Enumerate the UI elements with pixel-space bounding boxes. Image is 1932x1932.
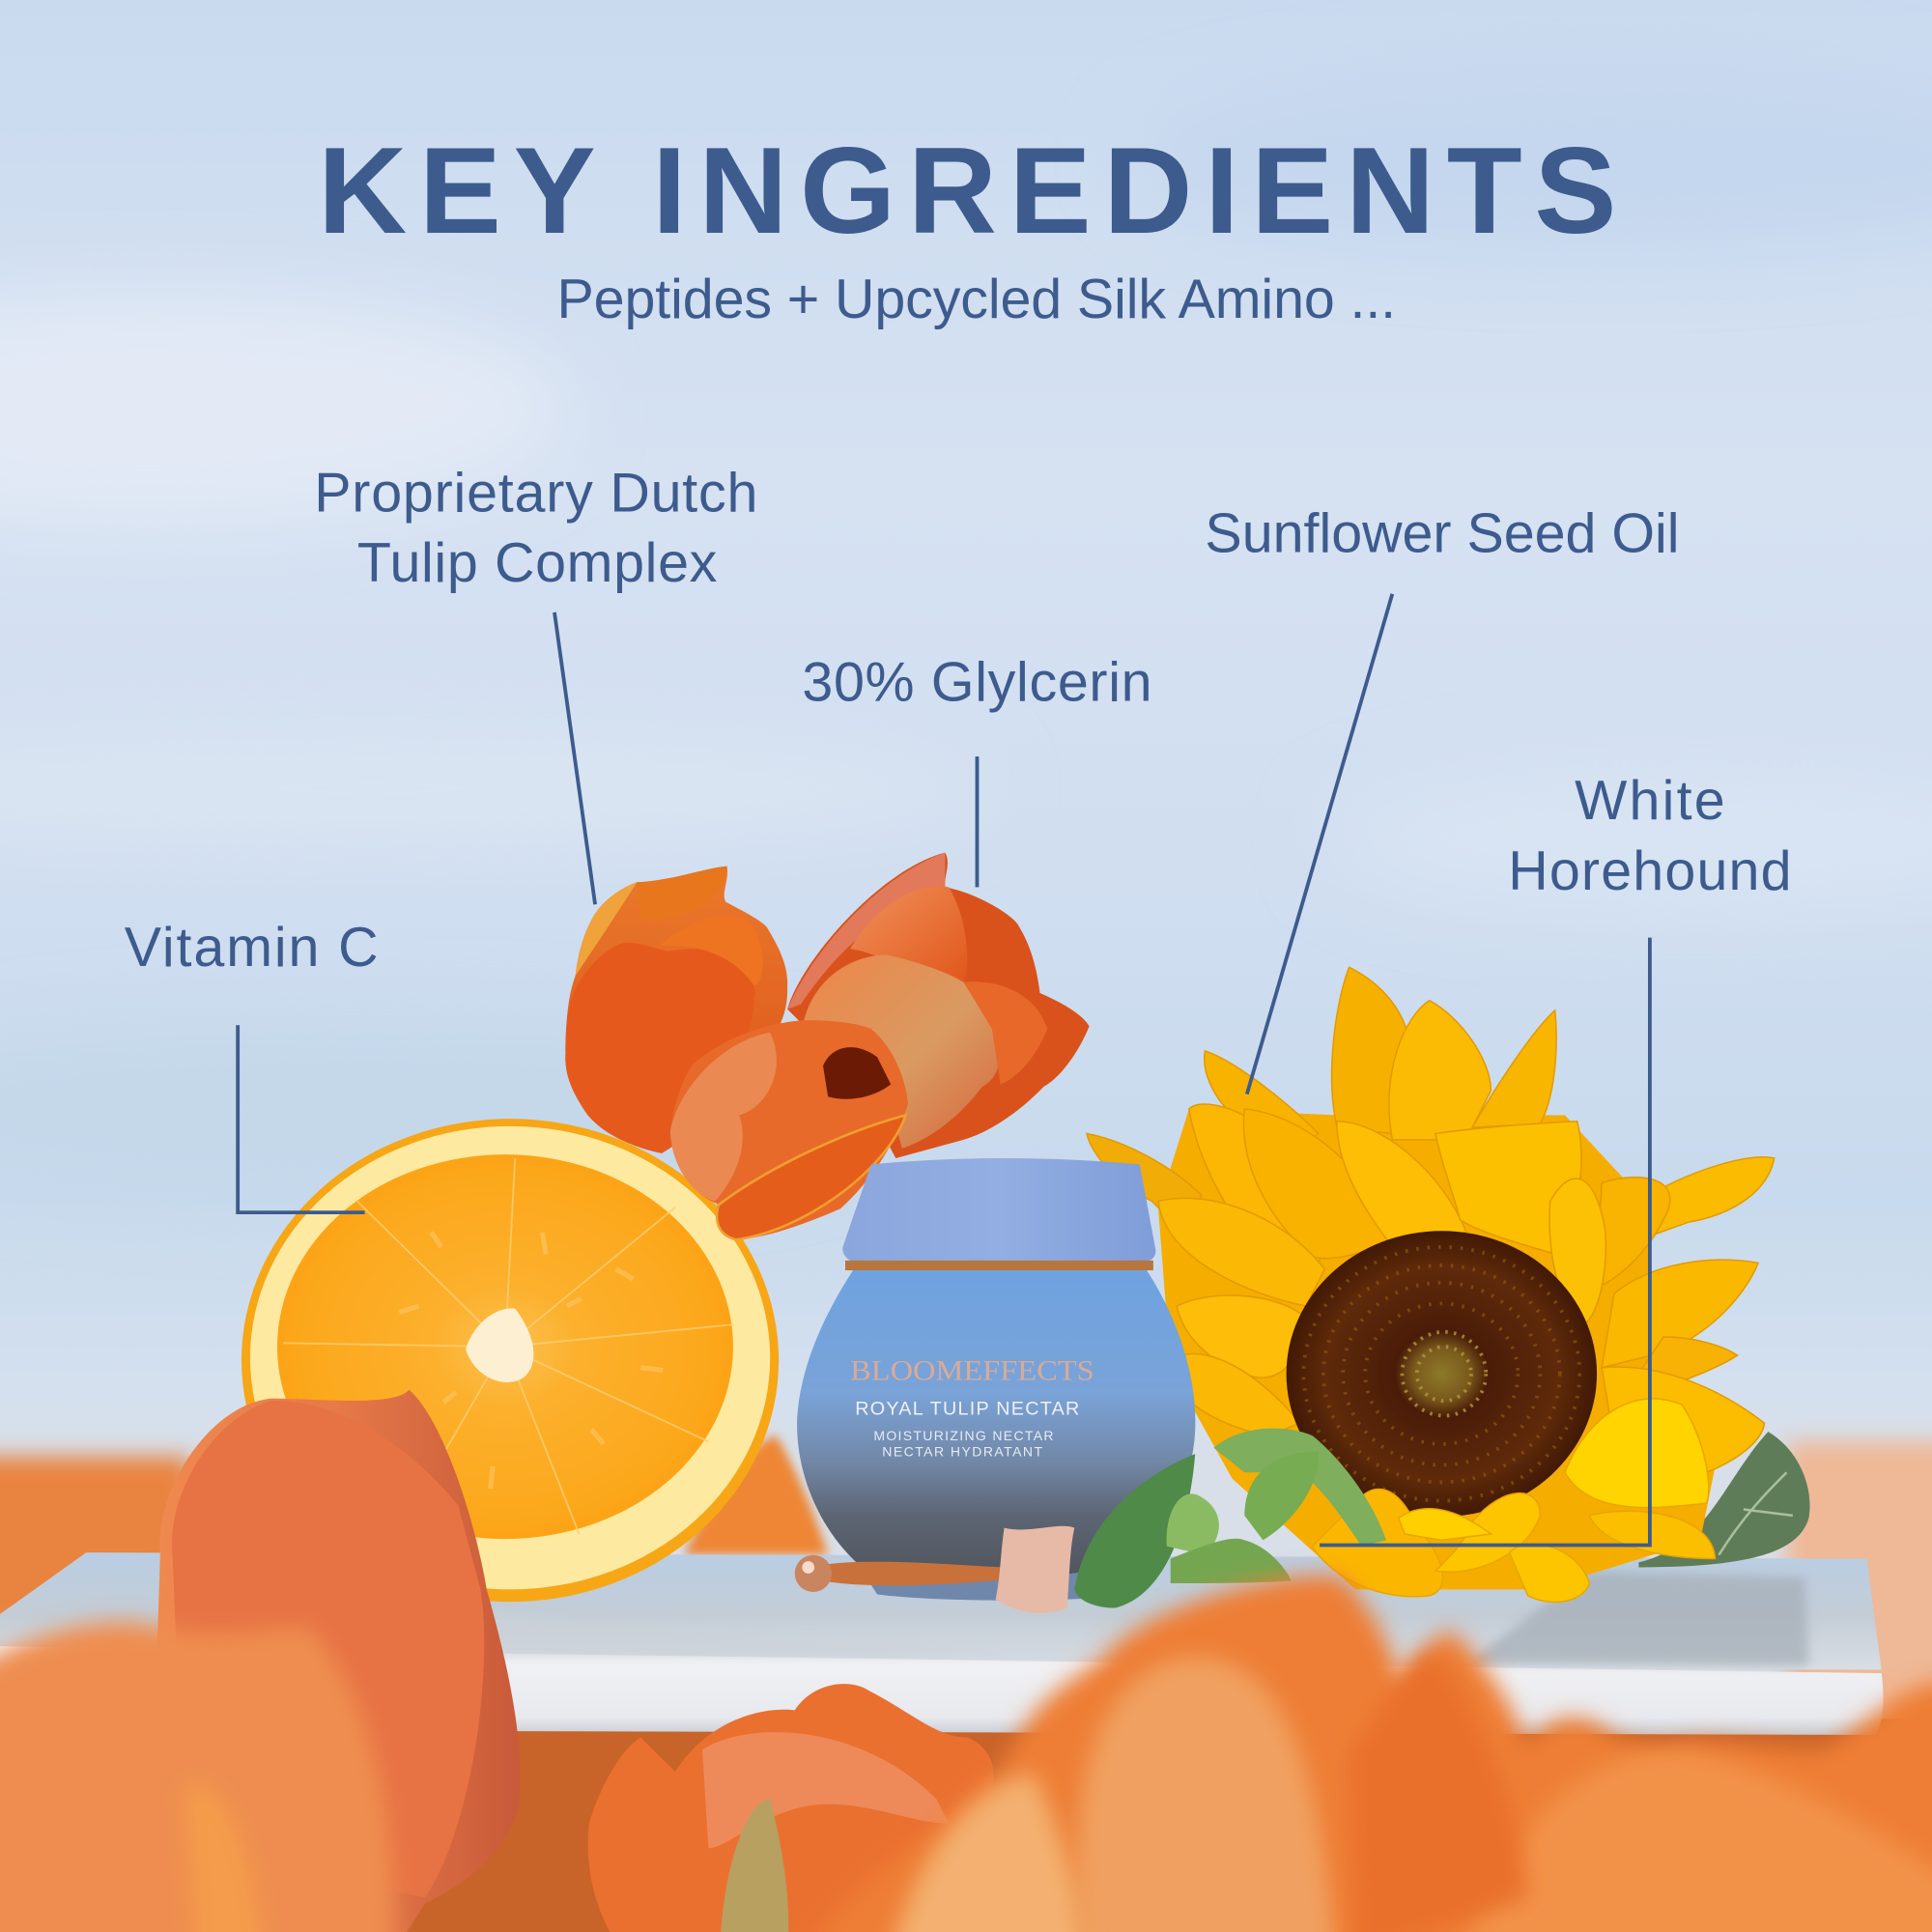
foreground tulip: large left (148, 1390, 520, 1932)
foreground blurred tulips: right (801, 1575, 1932, 1932)
jar glass base (856, 1562, 1133, 1601)
facial roller (795, 1526, 1074, 1613)
mint leaves (1074, 1429, 1386, 1608)
petals underlay (1158, 1109, 1725, 1589)
sunflower leaf (1638, 1432, 1810, 1567)
tulip: upper left (565, 867, 787, 1153)
background: blurred tulip field on horizon (0, 1435, 1932, 1932)
label: tulip complex (314, 462, 757, 904)
jar body (797, 1269, 1195, 1578)
label: vitamin C: Vitamin C (125, 917, 379, 979)
jar label: ROYAL TULIP NECTAR (855, 1398, 1079, 1419)
tulip: lower front (670, 1020, 908, 1239)
jar lid (842, 1158, 1155, 1262)
title: KEY INGREDIENTS (318, 123, 1616, 260)
gold band (845, 1261, 1153, 1270)
sunflower seed disc (1287, 1231, 1597, 1517)
field below slab (0, 1719, 1932, 1932)
label: vitamin C (125, 917, 379, 1212)
sunflower (1087, 967, 1810, 1602)
label: tulip complex: Proprietary Dutch (314, 462, 757, 524)
jar label: BLOOMEFFECTS (850, 1356, 1094, 1387)
label: white horehound: Horehound (1508, 840, 1792, 902)
jar label (850, 1356, 1094, 1460)
label: glycerin: 30% Glylcerin (802, 652, 1152, 714)
label: white horehound (1320, 770, 1792, 1545)
jar label: NECTAR HYDRATANT (882, 1444, 1043, 1460)
jar label: MOISTURIZING NECTAR (873, 1428, 1054, 1443)
tulip: back right (787, 853, 1090, 1158)
jar (797, 1158, 1195, 1601)
label: white horehound: White (1575, 770, 1725, 832)
label: sunflower seed oil: Sunflower Seed Oil (1205, 502, 1680, 564)
label: sunflower seed oil (1205, 502, 1680, 1094)
marble slab (0, 1552, 1883, 1735)
orange slice (242, 1119, 779, 1602)
center foreground tulip (588, 1684, 994, 1932)
subtitle: Peptides + Upcycled Silk Amino ... (557, 269, 1396, 330)
foreground blurred tulips: left (0, 1622, 395, 1932)
label: tulip complex: Tulip Complex (357, 532, 718, 594)
